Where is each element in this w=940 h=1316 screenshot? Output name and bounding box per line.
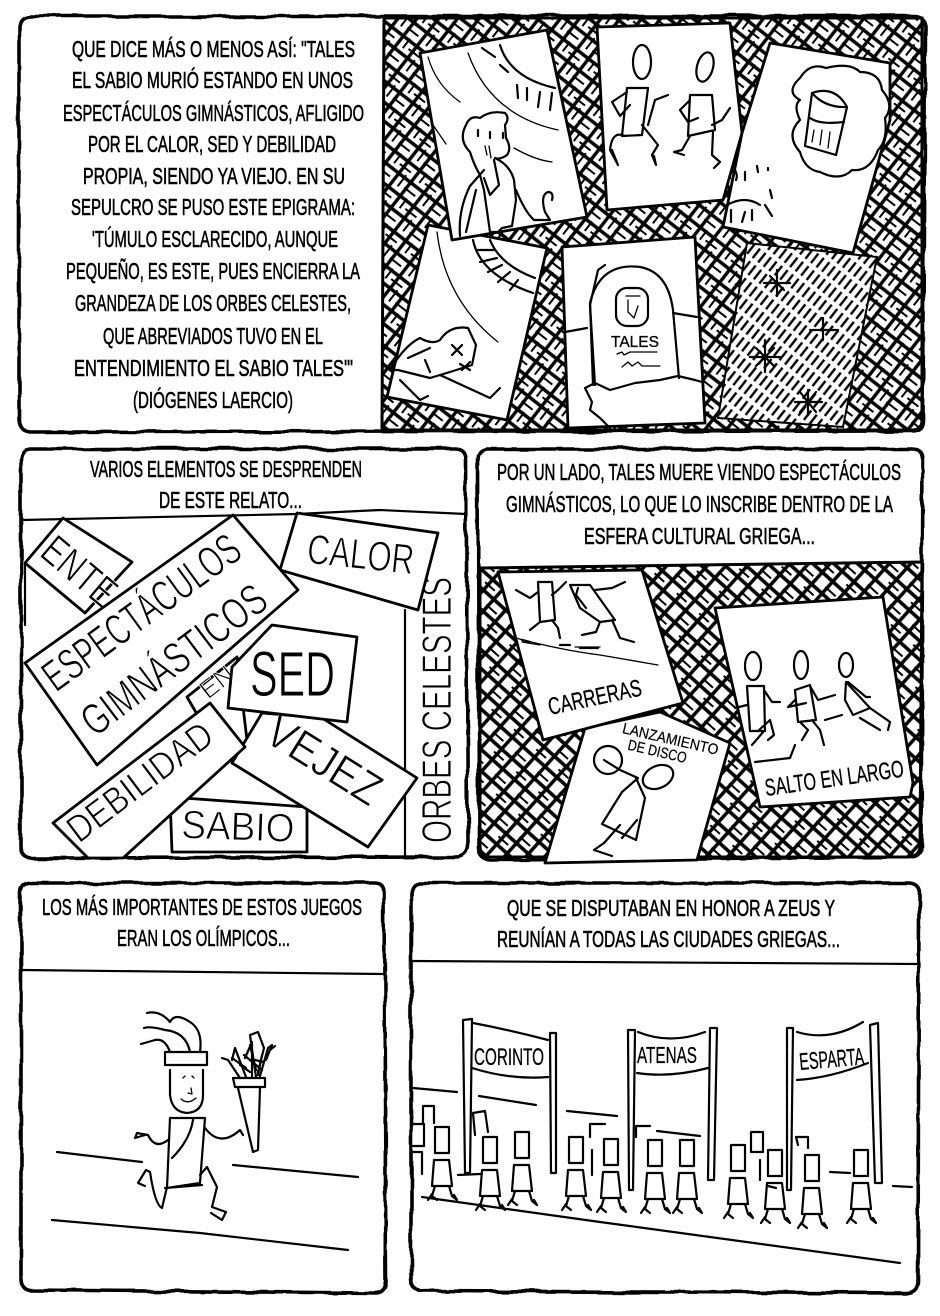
ground lines bbox=[413, 1088, 912, 1263]
tag: DEBILIDAD: DEBILIDAD bbox=[59, 714, 222, 851]
header text bbox=[497, 895, 840, 952]
panel frame bbox=[411, 883, 919, 1293]
tag: ESPECTACULOS GIMNASTICOS: ESPECTÁCULOS bbox=[33, 524, 250, 701]
crosshatch background bbox=[382, 18, 922, 430]
image: Thales in the stands bbox=[420, 30, 587, 240]
header rule bbox=[22, 510, 466, 520]
tag: ESPECTACULOS GIMNASTICOS: GIMNÁSTICOS bbox=[72, 574, 277, 746]
text block: Diogenes Laercio quote bbox=[63, 36, 364, 413]
tag: SED bbox=[228, 625, 357, 722]
header text: ESFERA CULTURAL GRIEGA... bbox=[584, 523, 815, 549]
panel: epitaph bbox=[19, 16, 925, 432]
crosshatch background bbox=[480, 562, 922, 857]
track lines bbox=[52, 1152, 358, 1250]
image: thought of water glass bbox=[723, 43, 890, 253]
header text: VARIOS ELEMENTOS SE DESPRENDEN bbox=[90, 456, 362, 482]
text block: Diogenes Laercio quote: EL SABIO MURIÓ ESTANDO EN UNOS bbox=[72, 67, 353, 93]
icon: runner with torch bbox=[135, 1012, 275, 1220]
text block: Diogenes Laercio quote: QUE DICE MÁS O MENOS ASÍ: "TALES bbox=[72, 36, 355, 62]
tag: CALOR bbox=[280, 513, 438, 610]
image: stadium death bbox=[387, 225, 547, 420]
tag: hidden bbox=[187, 657, 247, 762]
tag: VEJEZ bbox=[232, 704, 417, 847]
gate: Esparta bbox=[787, 1022, 882, 1190]
text block: Diogenes Laercio quote: PEQUEÑO, ES ESTE, PUES ENCIERRA LA bbox=[66, 258, 360, 284]
gate: Atenas: ATENAS bbox=[637, 1042, 697, 1068]
text block: Diogenes Laercio quote: (DIÓGENES LAERCIO) bbox=[133, 387, 293, 413]
panel frame bbox=[21, 883, 386, 1293]
text block: Diogenes Laercio quote: PROPIA, SIENDO YA VIEJO. EN SU bbox=[83, 163, 345, 189]
tag: CALOR: CALOR bbox=[305, 525, 416, 583]
gate: Atenas bbox=[628, 1028, 717, 1190]
label: lanzamiento de disco: DE DISCO bbox=[626, 737, 688, 767]
text block: Diogenes Laercio quote: ENTENDIMIENTO EL SABIO TALES'" bbox=[74, 355, 353, 381]
panel: elements of the story bbox=[21, 449, 468, 858]
image: long jump bbox=[715, 597, 913, 807]
image: tombstone of Thales bbox=[562, 237, 705, 428]
tag: SABIO: SABIO bbox=[181, 803, 295, 851]
panel: gymnastic spectacles bbox=[478, 449, 923, 863]
gate: Esparta: ESPARTA bbox=[798, 1043, 865, 1076]
header text: DE ESTE RELATO... bbox=[159, 487, 302, 513]
gate: Corinto: CORINTO bbox=[474, 1044, 544, 1071]
header text bbox=[42, 894, 362, 951]
text block: Diogenes Laercio quote: 'TÚMULO ESCLARECIDO, AUNQUE bbox=[92, 226, 338, 252]
text block: Diogenes Laercio quote: QUE ABREVIADOS TUVO EN EL bbox=[103, 323, 323, 349]
image: two runners bbox=[597, 23, 742, 210]
image: discus throw bbox=[545, 712, 730, 863]
tag: hidden: EN bbox=[193, 659, 240, 705]
tag: SED: SED bbox=[250, 638, 335, 710]
tag: VEJEZ: VEJEZ bbox=[257, 704, 392, 816]
tag: ESPECTACULOS GIMNASTICOS bbox=[25, 515, 298, 765]
rule left bbox=[24, 563, 26, 625]
text block: Diogenes Laercio quote: GRANDEZA DE LOS ORBES CELESTES, bbox=[75, 290, 351, 316]
tombstone name: TALES bbox=[611, 334, 659, 351]
tag: ENTE: ENTE bbox=[32, 526, 127, 616]
image: night sky with stars bbox=[718, 243, 877, 427]
text block: Diogenes Laercio quote: POR EL CALOR, SED Y DEBILIDAD bbox=[88, 131, 336, 157]
text block: Diogenes Laercio quote: ESPECTÁCULOS GIMNÁSTICOS, AFLIGIDO bbox=[63, 100, 364, 126]
label: lanzamiento de disco: LANZAMIENTO bbox=[621, 720, 720, 759]
tag: ORBES CELESTES: ORBES CELESTES bbox=[413, 577, 460, 843]
header rule bbox=[22, 970, 385, 974]
image: races bbox=[498, 570, 683, 740]
header text: LOS MÁS IMPORTANTES DE ESTOS JUEGOS bbox=[42, 894, 362, 920]
tag: ENTE bbox=[25, 518, 132, 616]
header text bbox=[90, 456, 362, 513]
text block: Diogenes Laercio quote: SEPULCRO SE PUSO ESTE EPIGRAMA: bbox=[71, 194, 355, 220]
panel frame bbox=[478, 449, 923, 860]
label: carreras: CARRERAS bbox=[546, 675, 644, 721]
panel frame bbox=[21, 449, 468, 858]
header text: ERAN LOS OLÍMPICOS... bbox=[117, 925, 290, 951]
panel: Olympic games bbox=[21, 883, 386, 1293]
panel frame bbox=[19, 16, 925, 432]
athletes bbox=[413, 1106, 876, 1228]
header rule bbox=[412, 961, 918, 964]
gate: Corinto bbox=[463, 1019, 556, 1173]
panel: city delegations bbox=[411, 883, 919, 1293]
header text bbox=[497, 459, 901, 549]
